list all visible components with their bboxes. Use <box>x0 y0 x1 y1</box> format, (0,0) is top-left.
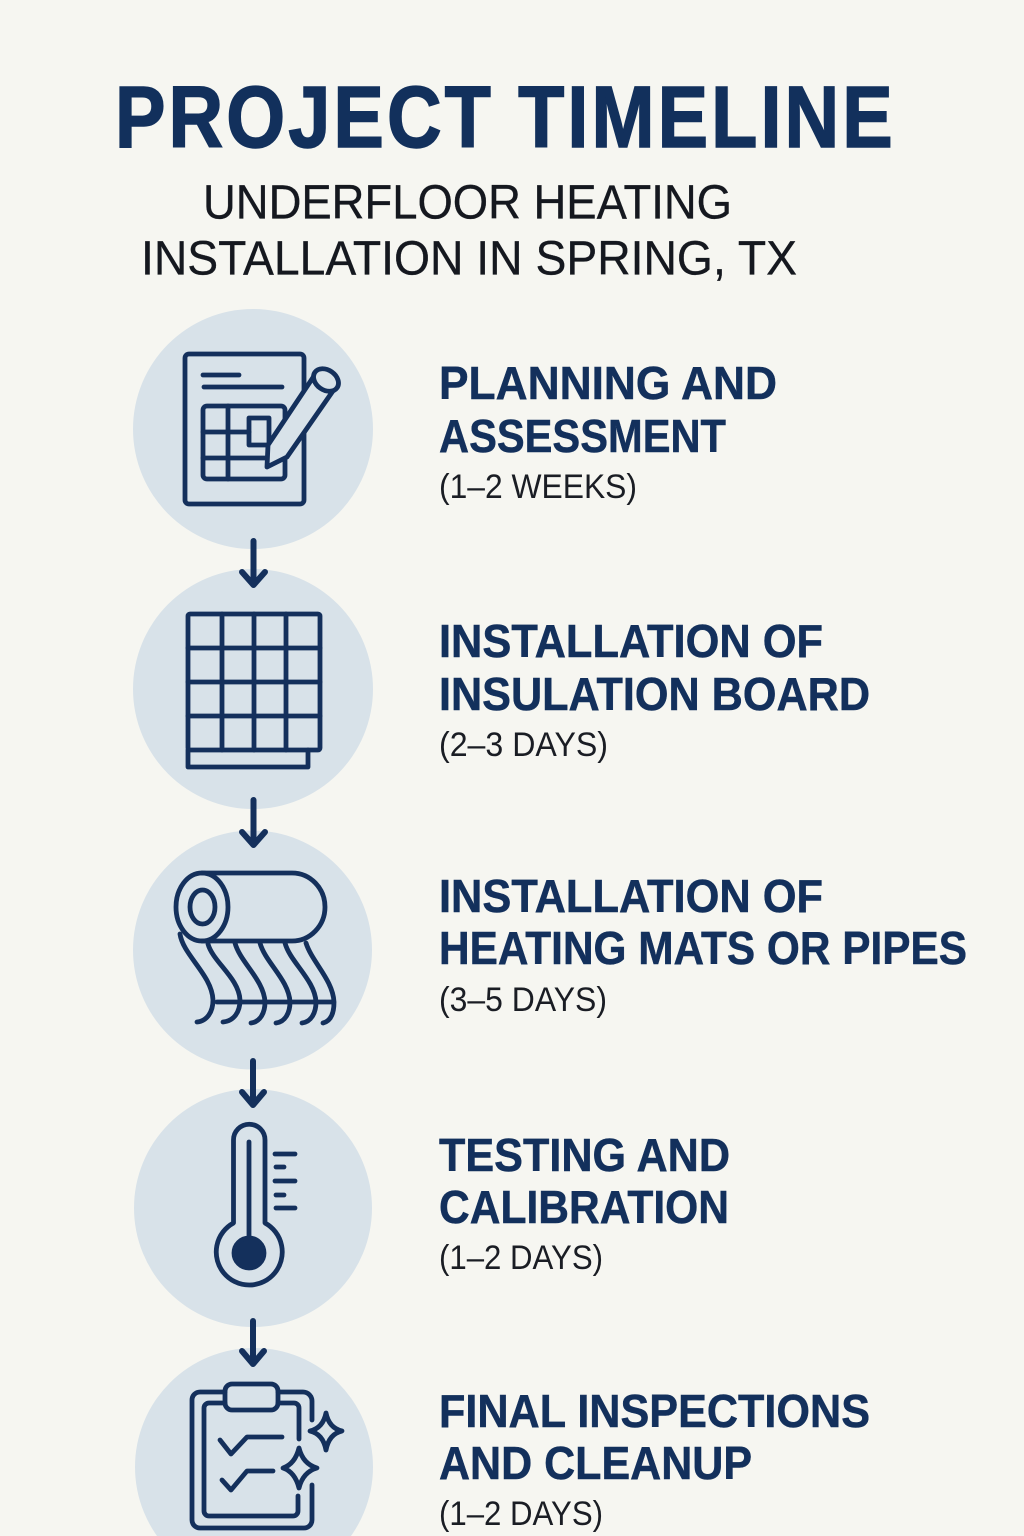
heading: step 3 <box>439 870 967 974</box>
arrow: step 2 to 3 <box>242 800 265 845</box>
arrow: step 4 to 5 <box>242 1321 264 1364</box>
step 2: insulation board <box>133 569 870 809</box>
duration: step 1: (1–2 WEEKS) <box>439 468 637 506</box>
heading: step 1 <box>439 357 777 462</box>
subtitle: UNDERFLOOR HEATING <box>203 176 732 230</box>
heading: step 1: PLANNING AND <box>439 357 777 409</box>
heading: step 4: TESTING AND <box>439 1129 730 1181</box>
subtitle: INSTALLATION IN SPRING, TX <box>141 232 797 286</box>
duration: step 5: (1–2 DAYS) <box>439 1495 603 1533</box>
heading: step 4: CALIBRATION <box>439 1181 729 1233</box>
heading: step 2: INSULATION BOARD <box>439 668 870 720</box>
step 3: heating mats or pipes <box>133 830 967 1070</box>
heading: step 5 <box>439 1385 870 1489</box>
heading: step 3: INSTALLATION OF <box>439 870 823 922</box>
heading: step 2: INSTALLATION OF <box>439 615 823 667</box>
duration: step 4: (1–2 DAYS) <box>439 1239 603 1277</box>
heading: step 1: ASSESSMENT <box>439 410 726 462</box>
icon: insulation board grid <box>133 569 373 809</box>
duration: step 2: (2–3 DAYS) <box>439 726 608 764</box>
duration: step 3: (3–5 DAYS) <box>439 981 607 1019</box>
icon: thermometer <box>134 1089 372 1327</box>
heading: step 5: AND CLEANUP <box>439 1437 752 1489</box>
heading: step 5: FINAL INSPECTIONS <box>439 1385 870 1437</box>
icon: clipboard with sparkles <box>135 1348 373 1536</box>
heading: step 4 <box>439 1129 730 1233</box>
arrow: step 3 to 4 <box>242 1061 264 1105</box>
subtitle <box>141 176 797 286</box>
step 4: testing and calibration <box>134 1089 730 1327</box>
arrow: step 1 to 2 <box>242 541 265 585</box>
heading: step 3: HEATING MATS OR PIPES <box>439 922 967 974</box>
heading: step 2 <box>439 615 870 720</box>
icon: heating mat roll <box>133 830 372 1070</box>
title: PROJECT TIMELINE <box>115 69 893 166</box>
step 1: planning and assessment <box>133 309 777 549</box>
icon: document with pencil <box>133 309 373 549</box>
step 5: final inspections and cleanup <box>135 1348 870 1536</box>
